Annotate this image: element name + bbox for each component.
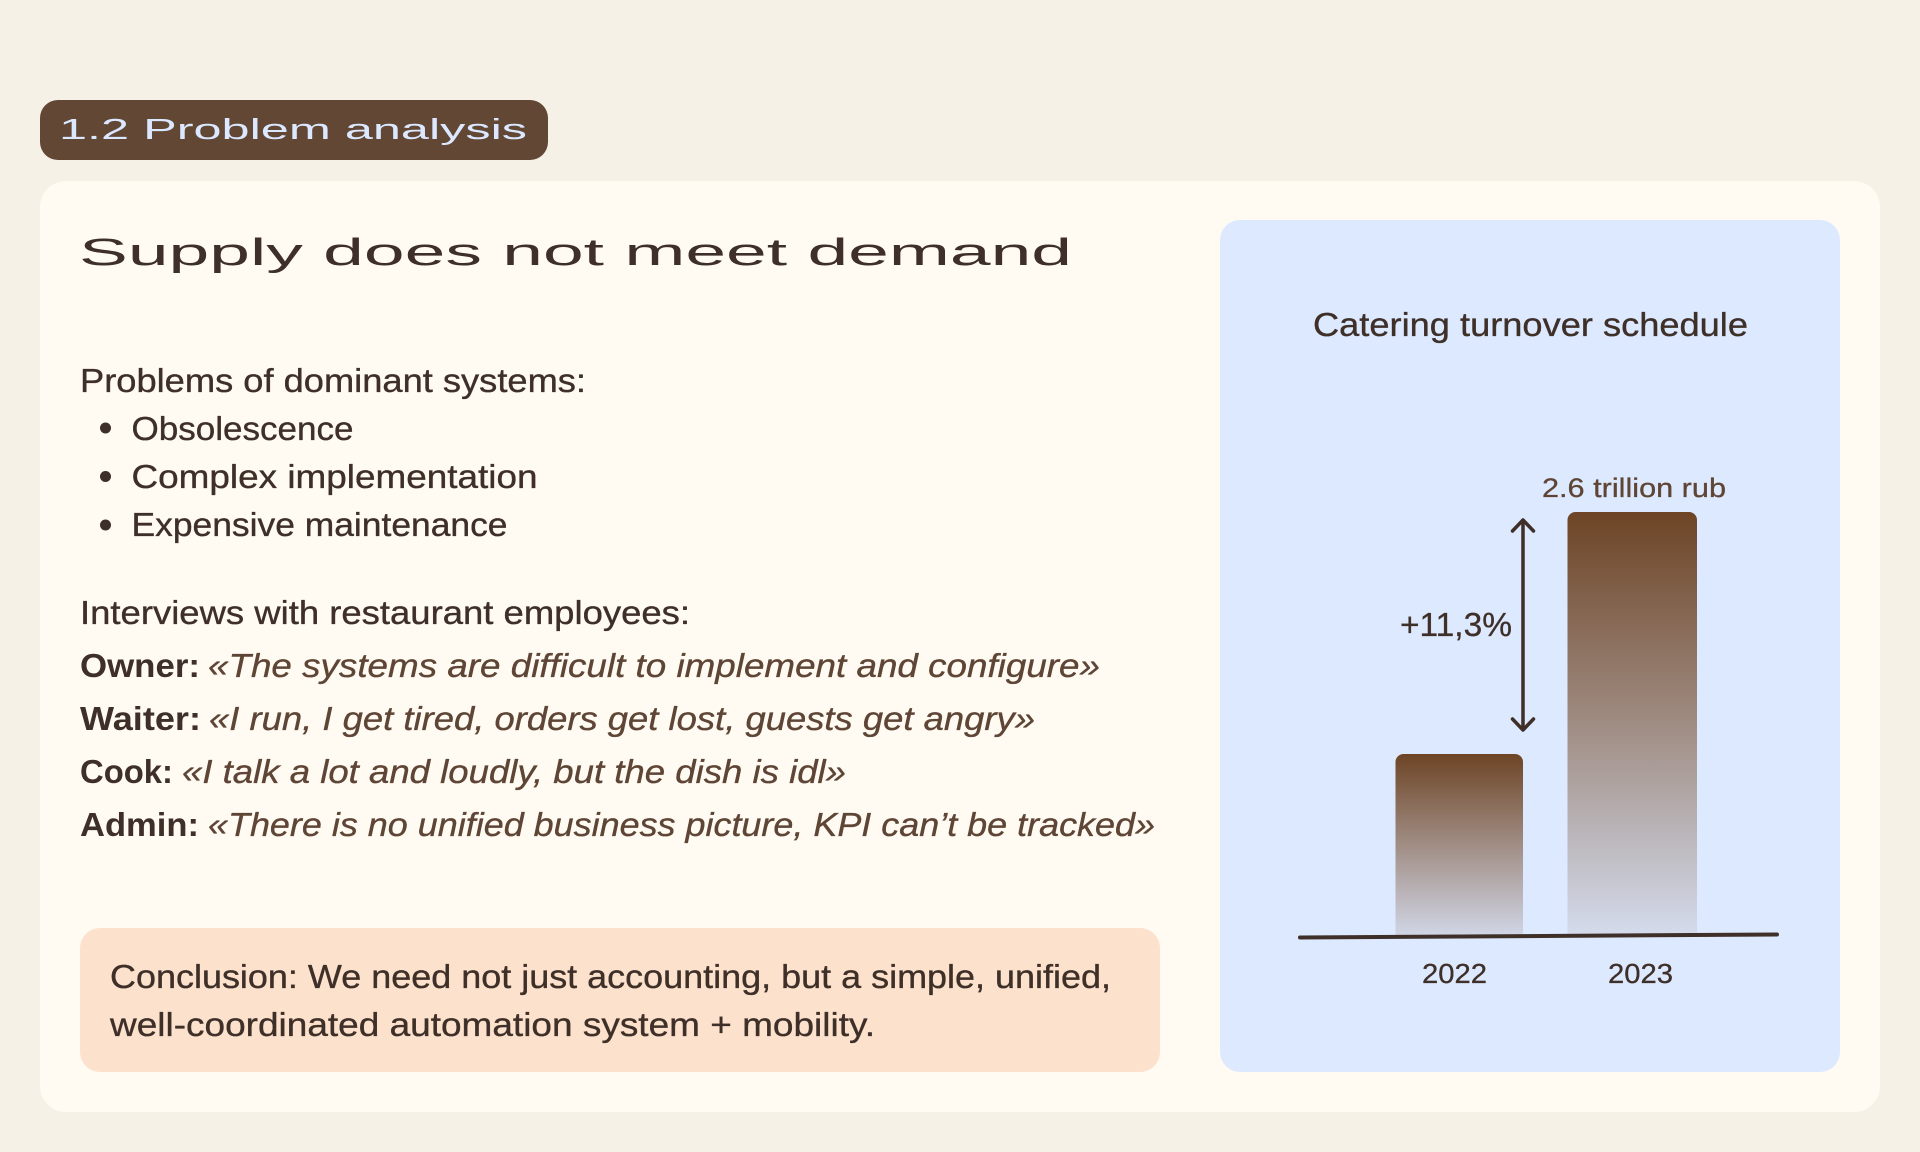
text block: interviews with restaurant employees: «The systems are difficult to implement and configure» [208, 647, 1100, 684]
heading: supply does not meet demand: Supply does not meet demand [79, 232, 1072, 274]
text block: interviews with restaurant employees: Waiter: [80, 700, 201, 737]
text block: interviews with restaurant employees [80, 594, 1155, 843]
value label: 2.6 trillion rub: 2.6 trillion rub [1542, 473, 1726, 503]
text block: interviews with restaurant employees: Interviews with restaurant employees: [80, 594, 690, 631]
axis label: 2022: 2022 [1422, 958, 1487, 989]
bar: 2022 [1396, 754, 1523, 935]
arrow: growth between years [1512, 520, 1534, 730]
text block: interviews with restaurant employees: «There is no unified business picture, KPI can’t be tracked» [208, 806, 1155, 843]
section tag: 1.2 Problem analysis: 1.2 Problem analysis [59, 114, 527, 146]
text block: problems of dominant systems: Obsolescence [132, 410, 354, 447]
text block: interviews with restaurant employees: Admin: [80, 806, 199, 843]
text block: interviews with restaurant employees: «I talk a lot and loudly, but the dish is idl» [182, 753, 846, 790]
axis label: 2023: 2023 [1608, 958, 1673, 989]
chart title: Catering turnover schedule [1313, 306, 1748, 343]
text block: problems of dominant systems: Complex implementation [132, 458, 538, 495]
text block: interviews with restaurant employees: Owner: [80, 647, 200, 684]
growth label: +11,3%: +11,3% [1400, 606, 1512, 643]
text block: problems of dominant systems: Expensive maintenance [132, 506, 508, 543]
text block: problems of dominant systems [80, 362, 586, 543]
chart baseline [1300, 934, 1777, 938]
text block: problems of dominant systems: Problems of dominant systems: [80, 362, 586, 399]
callout: conclusion: Conclusion: We need not just accounting, but a simple, unified, [110, 958, 1111, 995]
text block: interviews with restaurant employees: «I run, I get tired, orders get lost, guests get angry» [209, 700, 1035, 737]
panel: main card [40, 181, 1880, 1112]
section tag: 1.2 Problem analysis [40, 100, 548, 160]
panel: catering turnover chart [1220, 220, 1840, 1072]
callout: conclusion [80, 928, 1160, 1072]
callout: conclusion: well-coordinated automation system + mobility. [109, 1006, 875, 1043]
text block: interviews with restaurant employees: Cook: [80, 753, 173, 790]
bar: 2023 [1568, 512, 1697, 935]
